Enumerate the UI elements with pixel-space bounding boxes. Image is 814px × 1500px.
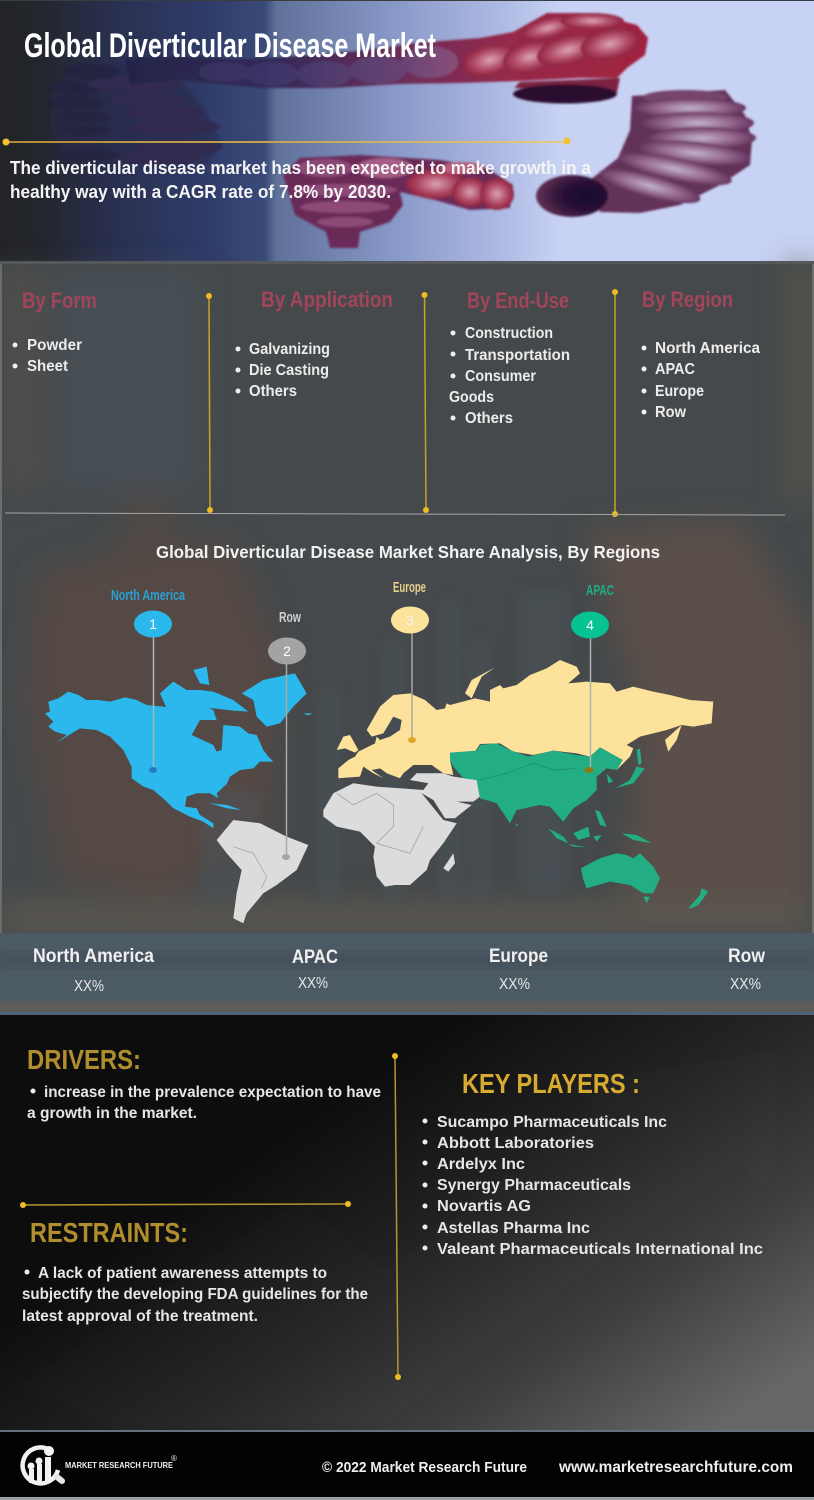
heading: By End-Use: By End-Use [467,288,569,313]
pin: APAC: APAC [586,582,614,599]
panel: region shares band [0,933,814,1015]
text: drivers: a growth in the market. [27,1105,197,1122]
pin: North America: North America [111,587,185,604]
intro text: The diverticular disease market has been expected to make growth in a [10,158,592,178]
panel: region shares band: XX% [499,976,530,993]
list: form: Sheet [27,358,69,375]
list: key players [422,1114,763,1258]
panel: drivers, restraints and key players [0,1015,814,1431]
panel: region shares band: XX% [298,975,328,992]
heading: key players: KEY PLAYERS : [462,1068,640,1099]
list: region: APAC [655,361,695,378]
list: form [12,337,82,375]
intro text [10,158,592,202]
pin: North America [111,587,185,773]
left coil [47,63,222,165]
logo: Market Research Future: ® [171,1454,177,1463]
list: form: Powder [27,337,82,354]
panel: region shares band: XX% [74,978,104,995]
intro text: healthy way with a CAGR rate of 7.8% by 2030. [10,182,391,202]
map: South America and Africa [217,773,480,923]
divider: vertical gold line [392,1053,401,1380]
panel: footer [0,1430,814,1500]
pin: Europe: Europe [393,579,426,596]
pin: Row [268,609,306,860]
list: key players: Abbott Laboratories [437,1135,594,1152]
heading: By Region: By Region [642,287,733,312]
map: North America [45,667,313,828]
heading: By Application: By Application [261,287,393,312]
map: Europe and Russia [337,660,713,778]
map: world regions [45,660,713,923]
chart title: Global Diverticular Disease Market Share Analysis, By Regions [156,542,660,562]
footer text: website: www.marketresearchfuture.com [558,1459,793,1476]
text: restraints: subjectify the developing FDA guidelines for the [22,1286,368,1303]
top tube [125,13,648,88]
pin: North America: 1 [149,616,157,632]
list: key players: Novartis AG [437,1198,531,1215]
right coil [590,90,756,213]
pin: Row: 2 [283,643,291,659]
pin: Europe: 3 [406,612,414,628]
heading: By Form: By Form [22,288,97,313]
panel: region shares band: Row [728,946,765,967]
text: drivers [27,1084,381,1122]
text: drivers: increase in the prevalence expectation to have [44,1084,381,1101]
panel: region shares band: XX% [730,976,761,993]
bottom section [283,155,514,248]
list: application: Galvanizing [249,341,330,358]
list: end-use: Goods [449,389,494,406]
list: application [236,341,330,400]
list: key players: Astellas Pharma Inc [437,1220,590,1237]
pin: APAC [571,582,614,773]
list: application: Others [249,383,297,400]
heading: drivers: DRIVERS: [27,1044,141,1075]
list: key players: Ardelyx Inc [437,1156,525,1173]
panel: segmentation and map background [0,261,814,936]
pin: Europe [391,579,429,743]
text: restraints: A lack of patient awareness attempts to [38,1265,327,1282]
list: key players: Synergy Pharmaceuticals [437,1177,631,1194]
logo: Market Research Future: MARKET RESEARCH FUTURE [65,1461,174,1470]
list: key players: Sucampo Pharmaceuticals Inc [437,1114,667,1131]
list: end-use: Consumer [465,368,536,385]
list: region: Europe [655,383,704,400]
list: application: Die Casting [249,362,329,379]
map: Asia Pacific [450,743,708,908]
pin: APAC: 4 [586,617,594,633]
footer text: copyright: © 2022 Market Research Future [322,1459,527,1476]
list: end-use: Others [465,410,513,427]
list: end-use [449,325,570,427]
divider: restraints line [20,1201,351,1208]
list: end-use: Construction [465,325,553,342]
text: restraints: latest approval of the treatment. [22,1308,258,1325]
list: end-use: Transportation [465,347,570,364]
heading: restraints: RESTRAINTS: [30,1217,188,1248]
list: region [642,340,760,421]
list: region: North America [655,340,760,357]
logo: Market Research Future [23,1446,177,1483]
pin: Row: Row [279,609,301,626]
panel: header [0,1,814,261]
illustration: colon [47,11,756,248]
list: key players: Valeant Pharmaceuticals International Inc [437,1241,763,1258]
list: region: Row [655,404,687,421]
title: Global Diverticular Disease Market [24,27,436,65]
divider: header gold line [2,138,570,146]
panel: region shares band: North America [33,946,154,967]
colon mouth right [536,175,608,217]
panel: region shares band: APAC [292,947,338,968]
panel: region shares band: Europe [489,946,548,967]
colon mouth [513,78,620,104]
dividers: segment gold lines [206,289,618,517]
text: restraints [22,1265,368,1325]
